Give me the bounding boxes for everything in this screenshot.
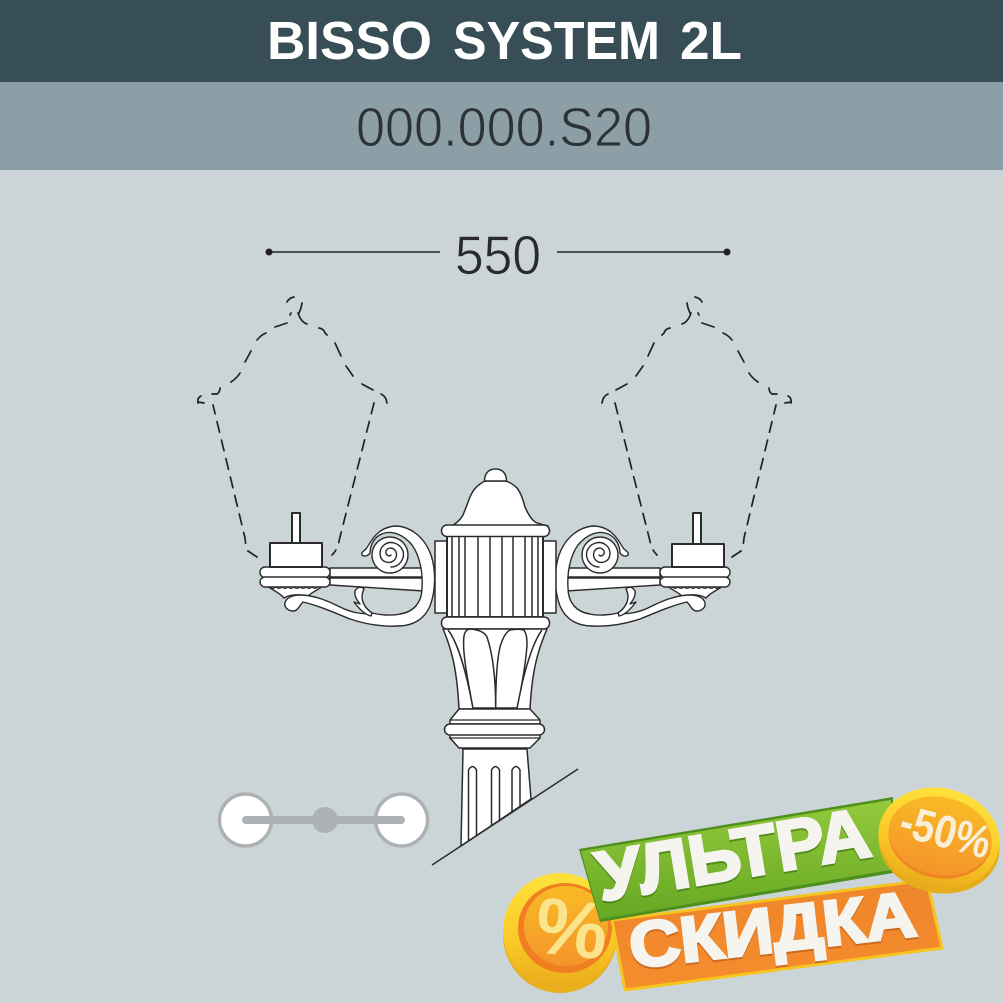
orange band СКИДКА: СКИДКА xyxy=(625,878,920,982)
top view symbol xyxy=(220,794,428,846)
left lamp holder xyxy=(270,513,322,567)
width dimension 550: 550 xyxy=(455,224,541,286)
left lantern dashed outline xyxy=(198,297,387,557)
collar xyxy=(444,709,544,748)
lamp post drawing xyxy=(260,469,730,865)
product code band: 000.000.S20 xyxy=(356,96,652,158)
acanthus capital xyxy=(443,629,547,709)
left arm xyxy=(260,526,435,626)
promo badge xyxy=(503,776,1003,993)
sloped ground line xyxy=(432,769,578,865)
title banner: SYSTEM xyxy=(453,11,660,71)
left coin xyxy=(503,873,617,993)
title banner: 2L xyxy=(680,11,742,71)
product code band xyxy=(0,82,1003,170)
right lantern dashed outline xyxy=(602,297,791,557)
title banner xyxy=(0,0,1003,82)
right lamp holder xyxy=(672,513,724,567)
width dimension 550 xyxy=(266,224,730,286)
fluted shaft xyxy=(461,749,531,846)
right coin xyxy=(869,776,1003,905)
orange band СКИДКА: СКИДКА xyxy=(625,880,920,984)
green band УЛЬТРА: УЛЬТРА xyxy=(591,795,876,918)
column head dome xyxy=(452,469,548,526)
column head fluted body xyxy=(435,525,556,629)
left coin: % xyxy=(531,880,612,976)
green band УЛЬТРА: УЛЬТРА xyxy=(591,793,876,916)
title banner: BISSO xyxy=(267,11,432,71)
right arm xyxy=(555,526,730,626)
